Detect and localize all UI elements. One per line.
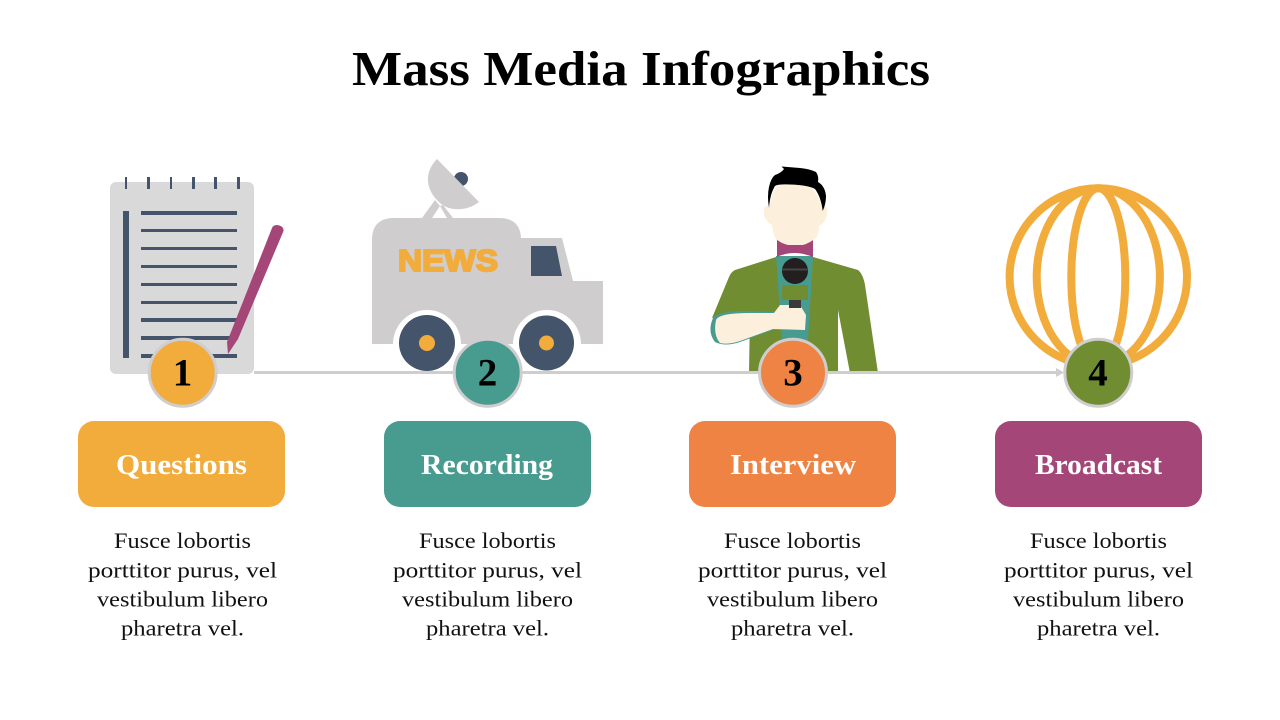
text block: Broadcast: vestibulum libero [1013, 586, 1184, 612]
text block: Broadcast [1004, 528, 1193, 640]
step 1 badge: 1 [173, 352, 192, 394]
text block: Interview: porttitor purus, vel [698, 558, 887, 582]
card: Broadcast: Broadcast [1035, 449, 1162, 481]
card: Broadcast [995, 421, 1202, 507]
card: Questions: Questions [116, 449, 247, 481]
text block: Recording [393, 528, 582, 640]
text block: Interview: vestibulum libero [707, 586, 878, 612]
text block: Interview: pharetra vel. [731, 616, 854, 640]
step 3 badge [760, 339, 826, 406]
text block: Recording: pharetra vel. [426, 616, 549, 640]
icon: notepad and pen [110, 177, 284, 374]
step 2 badge [454, 339, 521, 406]
text block: Interview [698, 528, 887, 640]
text block: Recording: porttitor purus, vel [393, 558, 582, 582]
title: Mass Media Infographics [352, 41, 930, 96]
card: Recording: Recording [421, 449, 554, 481]
card: Interview [689, 421, 896, 507]
text block: Broadcast: Fusce lobortis [1030, 528, 1167, 553]
text block: Questions [88, 528, 277, 640]
text block: Recording: Fusce lobortis [419, 528, 556, 553]
text block: Questions: vestibulum libero [97, 586, 268, 612]
step 2 badge: 2 [478, 352, 497, 394]
card: Interview: Interview [730, 449, 856, 481]
text block: Questions: Fusce lobortis [114, 528, 251, 553]
step 4 badge [1065, 339, 1132, 406]
text block: Questions: pharetra vel. [121, 616, 244, 640]
text block: Interview: Fusce lobortis [724, 528, 861, 553]
icon: news van: NEWS [398, 243, 498, 278]
card: Questions [78, 421, 285, 507]
text block: Broadcast: porttitor purus, vel [1004, 558, 1193, 582]
text block: Broadcast: pharetra vel. [1037, 616, 1160, 640]
text block: Questions: porttitor purus, vel [88, 558, 277, 582]
timeline arrow [254, 368, 1064, 377]
step 1 badge [149, 339, 216, 406]
icon: globe [1010, 188, 1187, 366]
text block: Recording: vestibulum libero [402, 586, 573, 612]
step 3 badge: 3 [783, 352, 803, 394]
step 4 badge: 4 [1088, 352, 1108, 394]
icon: news van [372, 159, 603, 378]
card: Recording [384, 421, 591, 507]
icon: reporter with microphone [710, 166, 878, 373]
